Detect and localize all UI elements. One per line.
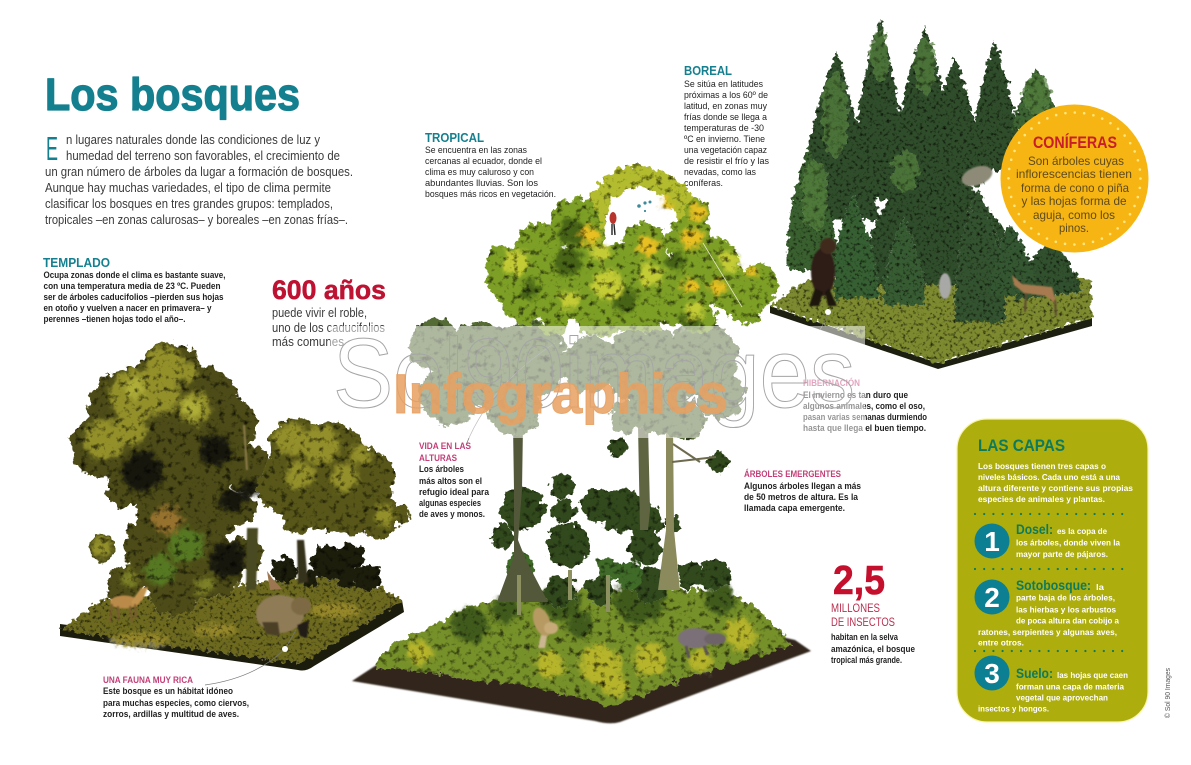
text: árboles emergentes: Algunos árboles llegan a más <box>744 481 861 491</box>
text: vida en las alturas: ALTURAS <box>419 453 457 463</box>
stat: 2,5 millones: DE INSECTOS <box>831 615 895 629</box>
ground: temperate <box>60 572 404 670</box>
stat: 2,5 millones: amazónica, el bosque <box>831 644 915 654</box>
animal: fox <box>267 571 282 590</box>
layer 1: dosel: mayor parte de pájaros. <box>1016 549 1108 559</box>
text: árboles emergentes: ÁRBOLES EMERGENTES <box>744 468 841 479</box>
layer 3: suelo: Suelo: <box>1016 666 1053 681</box>
ground: tropical moss <box>376 572 792 706</box>
layer 3: suelo: vegetal que aprovechan <box>1016 692 1108 702</box>
illustration: boreal forest diorama <box>770 20 1092 369</box>
intro text block: tropicales –en zonas calurosas– y boreales –en zonas frías–. <box>45 213 348 227</box>
text: hibernación: El invierno es tan duro que <box>803 390 908 400</box>
panel intro: Los bosques tienen tres capas o <box>978 461 1106 471</box>
layer 1: dosel <box>974 522 1120 559</box>
stat: 600 años: 600 años <box>272 275 386 305</box>
layer 3: suelo: 3 <box>984 658 1000 689</box>
stat: 2,5 millones <box>831 557 915 665</box>
section: boreal: ºC en invierno. Tiene <box>684 134 765 145</box>
photo credit: © Sol 90 Images <box>1164 668 1172 718</box>
intro text block: n lugares naturales donde las condiciones de luz y <box>66 133 321 147</box>
text: árboles emergentes: llamada capa emergente. <box>744 503 845 513</box>
text: vida en las alturas: de aves y monos. <box>419 509 485 519</box>
section: boreal: latitud, en zonas muy <box>684 101 767 112</box>
section: tropical <box>425 130 556 200</box>
conifers: front row <box>833 190 1082 322</box>
text: una fauna muy rica: zorros, ardillas y multitud de aves. <box>103 709 239 719</box>
animal: deer boreal <box>1012 275 1057 316</box>
section: templado: Ocupa zonas donde el clima es bastante suave, <box>44 270 226 280</box>
section: tropical: cercanas al ecuador, donde el <box>425 156 542 167</box>
stat: 600 años: uno de los caducifolios <box>272 321 385 335</box>
trunks: tropical <box>497 425 716 615</box>
panel heading: LAS CAPAS <box>978 437 1065 455</box>
section: boreal: temperaturas de -30 <box>684 123 764 134</box>
section: templado: en otoño y vuelven a nacer en primavera– y <box>44 303 212 313</box>
layer 2: sotobosque: parte baja de los árboles, <box>1016 592 1115 602</box>
layer 1: dosel: Dosel: <box>1016 522 1053 537</box>
layer 2: sotobosque: de poca altura dan cobijo a <box>1016 616 1119 626</box>
panel intro: niveles básicos. Cada uno está a una <box>978 472 1120 482</box>
section: templado <box>43 255 226 324</box>
callout: coníferas: Son árboles cuyas <box>1028 154 1124 168</box>
title: Los bosques <box>45 69 300 120</box>
layer 2: sotobosque: la <box>1096 582 1104 592</box>
ground: boreal <box>770 268 1092 369</box>
text: hibernación: pasan varias semanas durmiendo <box>803 412 927 422</box>
text: vida en las alturas <box>419 441 490 519</box>
callout: coníferas: y las hojas forma de <box>1022 194 1127 208</box>
text: vida en las alturas: algunas especies <box>419 498 481 508</box>
text: una fauna muy rica: Este bosque es un hábitat idóneo <box>103 686 233 696</box>
understory: shrubs and clumps <box>491 438 731 608</box>
text: hibernación <box>803 377 927 433</box>
canopy: lower emergent trees <box>409 319 744 440</box>
leader dot: boreal bear <box>820 309 831 330</box>
section: tropical: bosques más ricos en vegetación. <box>425 189 556 200</box>
layer 3: suelo: forman una capa de materia <box>1016 682 1124 692</box>
tree canopy: right oak <box>257 419 409 591</box>
text: árboles emergentes <box>744 468 861 513</box>
section: boreal: nevadas, como las <box>684 167 756 178</box>
text: árboles emergentes: de 50 metros de altura. Es la <box>744 492 859 502</box>
layer 1: dosel: los árboles, donde viven la <box>1016 538 1120 548</box>
layer 2: sotobosque: entre otros. <box>978 638 1024 648</box>
section: boreal: de resistir el frío y las <box>684 156 769 167</box>
section: boreal <box>684 63 769 189</box>
canopy: upper tropical <box>484 177 779 338</box>
panel intro <box>978 461 1133 504</box>
section: templado: perennes –tienen hojas todo el año–. <box>44 314 186 324</box>
text: una fauna muy rica: UNA FAUNA MUY RICA <box>103 675 193 685</box>
callout: coníferas: aguja, como los <box>1033 208 1115 222</box>
stat: 600 años: puede vivir el roble, <box>272 306 367 320</box>
stat: 2,5 millones: MILLONES <box>831 601 880 615</box>
animal: deer <box>110 587 148 622</box>
section: boreal: próximas a los 60º de <box>684 90 768 101</box>
layer 2: sotobosque: 2 <box>984 582 1000 613</box>
illustration: tropical forest diorama <box>352 177 811 723</box>
conifers: back row <box>787 20 1060 285</box>
text: una fauna muy rica: para muchas especies, como ciervos, <box>103 698 249 708</box>
callout: coníferas: forma de cono o piña <box>1021 181 1129 195</box>
watermark: infographics: Infographics <box>393 362 728 425</box>
text: hibernación: hasta que llega el buen tiempo. <box>803 423 926 433</box>
section: templado: ser de árboles caducifolios –pierden sus hojas <box>44 292 224 302</box>
animal: wolf <box>939 273 951 299</box>
intro text block: E <box>46 130 58 167</box>
conifers: top highlights <box>802 30 1050 230</box>
stat: 2,5 millones: habitan en la selva <box>831 632 899 642</box>
trunks: temperate <box>244 425 308 590</box>
animal: bear <box>256 595 311 638</box>
text: vida en las alturas: VIDA EN LAS <box>419 441 471 451</box>
intro text block <box>45 130 353 227</box>
birds in canopy <box>610 200 652 235</box>
watermark band <box>330 326 865 438</box>
layer 3: suelo: insectos y hongos. <box>978 704 1049 714</box>
panel intro: altura diferente y contiene sus propias <box>978 483 1133 493</box>
intro text block: clasificar los bosques en tres grandes grupos: templados, <box>45 197 333 211</box>
section: boreal: BOREAL <box>684 63 732 78</box>
intro text block: un gran número de árboles da lugar a formación de bosques. <box>45 165 353 179</box>
leader: vida en las alturas <box>466 343 555 445</box>
layer 1: dosel: es la copa de <box>1057 526 1107 536</box>
illustration: temperate forest diorama <box>60 343 409 685</box>
callout: coníferas: CONÍFERAS <box>1033 133 1117 152</box>
intro text block: Aunque hay muchas variedades, el tipo de clima permite <box>45 181 331 195</box>
text: una fauna muy rica <box>103 675 249 719</box>
section: templado: TEMPLADO <box>43 255 110 270</box>
text: vida en las alturas: refugio ideal para <box>419 487 490 497</box>
layer 2: sotobosque: ratones, serpientes y algunas aves, <box>978 627 1117 637</box>
leader: árboles emergentes <box>703 243 742 307</box>
animal: tapir <box>678 628 726 658</box>
section: boreal: Se sitúa en latitudes <box>684 79 763 90</box>
animal: lynx <box>959 162 995 190</box>
section: boreal: coníferas. <box>684 178 723 189</box>
section: tropical: abundantes lluvias. Son los <box>425 178 538 189</box>
tree canopy: left oak <box>71 343 274 616</box>
stat: 600 años: más comunes <box>272 335 344 349</box>
layer 2: sotobosque: Sotobosque: <box>1016 578 1091 593</box>
section: tropical: clima es muy caluroso y con <box>425 167 534 178</box>
stat: 2,5 millones: 2,5 <box>833 557 885 603</box>
panel: las capas <box>957 419 1148 722</box>
animal: ocelot <box>529 605 558 648</box>
callout: coníferas: inflorescencias tienen <box>1016 167 1132 181</box>
layer 2: sotobosque <box>974 578 1119 648</box>
animal: standing bear <box>809 238 837 306</box>
section: tropical: Se encuentra en las zonas <box>425 145 527 156</box>
layer 2: sotobosque: las hierbas y los arbustos <box>1016 604 1116 614</box>
stat: 2,5 millones: tropical más grande. <box>831 655 902 665</box>
callout: coníferas <box>1000 104 1148 252</box>
layer 3: suelo <box>974 656 1128 714</box>
callout leader: fauna <box>205 630 296 685</box>
text: vida en las alturas: más altos son el <box>419 476 482 486</box>
intro text block: humedad del terreno son favorables, el crecimiento de <box>66 149 340 163</box>
layer 1: dosel: 1 <box>984 526 1000 557</box>
section: tropical: TROPICAL <box>425 130 484 145</box>
callout: coníferas: pinos. <box>1059 221 1089 235</box>
ground: tropical soil <box>352 604 811 723</box>
panel intro: especies de animales y plantas. <box>978 494 1105 504</box>
text: vida en las alturas: Los árboles <box>419 464 464 474</box>
section: boreal: una vegetación capaz <box>684 145 767 156</box>
text: hibernación: HIBERNACIÓN <box>803 377 860 388</box>
section: boreal: frías donde se llega a <box>684 112 768 123</box>
watermark: sol90images: Sol90images <box>333 318 855 428</box>
section: templado: con una temperatura media de 23 ºC. Pueden <box>44 281 221 291</box>
layer 3: suelo: las hojas que caen <box>1057 670 1128 680</box>
text: hibernación: algunos animales, como el oso, <box>803 401 925 411</box>
stat: 600 años <box>272 275 386 349</box>
